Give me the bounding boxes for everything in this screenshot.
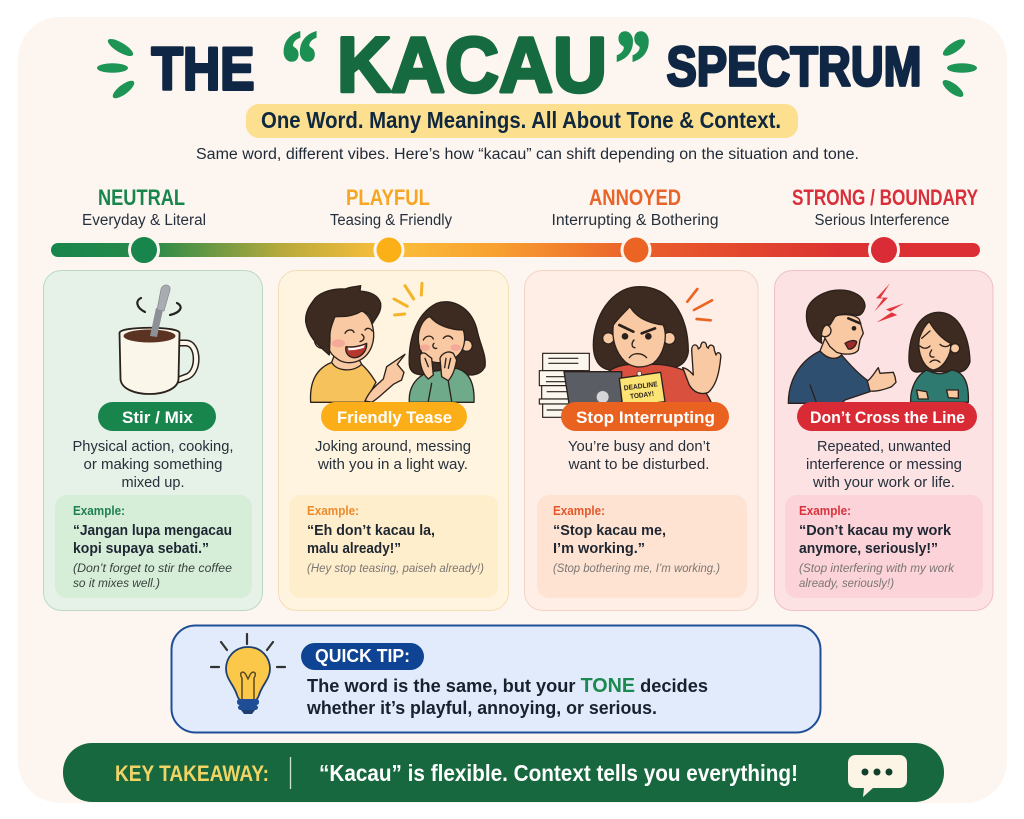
example box: “Stop kacau me,	[553, 523, 666, 539]
illustration: boy and girl laughing	[306, 283, 485, 402]
panel: neutral card	[44, 270, 262, 610]
heading: strong / boundary	[792, 185, 978, 229]
sticky note: deadline today: DEADLINE	[624, 381, 658, 392]
icon: yellow surprise rays	[394, 283, 422, 315]
description: or making something	[84, 456, 222, 473]
panel: quick tip	[172, 626, 820, 732]
description: Repeated, unwanted	[817, 438, 951, 455]
heading: annoyed	[552, 185, 718, 229]
intro sentence: Same word, different vibes. Here’s how “kacau” can shift depending on the situation and tone.	[196, 146, 859, 163]
example box: (Stop interfering with my work	[799, 563, 955, 575]
example box: (Hey stop teasing, paiseh already!)	[307, 563, 484, 575]
example box: (Don’t forget to stir the coffee	[73, 563, 232, 575]
example box: I’m working.”	[553, 541, 645, 557]
pill: stir / mix	[98, 402, 216, 431]
description	[72, 438, 234, 491]
example box	[785, 495, 983, 598]
pill: friendly tease: Friendly Tease	[337, 408, 452, 427]
example box: Example:	[307, 504, 359, 518]
heading: playful: PLAYFUL	[346, 185, 430, 210]
woman	[909, 312, 970, 402]
tip text	[306, 675, 708, 718]
description	[567, 438, 711, 473]
example box	[289, 495, 498, 598]
heading: playful: Teasing & Friendly	[330, 212, 452, 229]
marker: playful	[375, 236, 403, 264]
example box: Example:	[799, 504, 851, 518]
label: key takeaway: KEY TAKEAWAY:	[115, 761, 269, 786]
example box: Example:	[553, 504, 605, 518]
tip text: The word is the same, but your TONE decides	[307, 675, 708, 697]
pill: stop interrupting	[561, 402, 729, 431]
title word: opening quote: “	[281, 12, 318, 114]
heading: annoyed: ANNOYED	[589, 185, 681, 210]
pill: friendly tease	[321, 402, 467, 431]
boy	[306, 286, 405, 402]
subtitle pill	[246, 104, 798, 138]
example box: (Stop bothering me, I’m working.)	[553, 563, 720, 575]
description	[315, 438, 471, 473]
woman	[593, 287, 712, 410]
pill: don't cross the line	[797, 402, 977, 431]
icon: coffee cup with spoon	[120, 285, 196, 394]
description: Physical action, cooking,	[72, 438, 234, 455]
icon: raised stop hand	[683, 342, 721, 394]
tip text: whether it’s playful, annoying, or serious.	[306, 697, 657, 718]
panel: strong card	[774, 270, 993, 610]
example box	[55, 495, 252, 598]
sticky note: deadline today: TODAY!	[630, 391, 654, 401]
heading: annoyed: Interrupting & Bothering	[552, 212, 718, 229]
example box: “Eh don’t kacau la,	[307, 523, 435, 539]
marker: neutral	[130, 236, 158, 264]
icon: light bulb	[211, 634, 285, 714]
heading: neutral	[82, 185, 206, 229]
icon: red lightning bolts	[874, 283, 904, 322]
panel: playful card	[278, 270, 508, 610]
spectrum headings	[82, 185, 978, 229]
example box: “Jangan lupa mengacau	[73, 523, 232, 539]
quick tip pill: QUICK TIP:	[315, 646, 410, 666]
title	[97, 12, 977, 114]
icon: orange anger rays	[687, 289, 712, 320]
description: with your work or life.	[812, 474, 955, 491]
description: interference or messing	[806, 456, 962, 473]
example box: anymore, seriously!”	[799, 541, 938, 557]
icon: right sparkle	[940, 36, 977, 100]
sticky note: deadline today	[619, 371, 665, 407]
description: Joking around, messing	[315, 438, 471, 455]
illustration: annoyed woman at laptop	[539, 287, 721, 417]
title word: THE: THE	[152, 36, 254, 102]
quick tip pill	[301, 643, 424, 670]
marker: strong	[870, 236, 898, 264]
example box: “Don’t kacau my work	[799, 523, 952, 539]
description	[806, 438, 962, 491]
icon: left sparkle	[97, 36, 137, 101]
icon: speech bubble	[848, 755, 907, 797]
heading: strong / boundary: STRONG / BOUNDARY	[792, 185, 978, 210]
icon: paper stack	[539, 353, 589, 417]
marker: annoyed	[622, 236, 650, 264]
example box: so it mixes well.)	[73, 578, 160, 590]
illustration: man confronting woman	[788, 283, 970, 403]
man	[788, 290, 896, 403]
pill: don't cross the line: Don’t Cross the Line	[810, 408, 965, 427]
laptop	[564, 372, 622, 410]
heading: playful	[330, 185, 452, 229]
spectrum slider	[51, 236, 980, 264]
title word: SPECTRUM: SPECTRUM	[666, 34, 922, 98]
example box: Example:	[73, 504, 125, 518]
description: with you in a light way.	[317, 456, 468, 473]
description: mixed up.	[122, 474, 184, 491]
example box: kopi supaya sebati.”	[73, 541, 209, 557]
key takeaway bar	[63, 743, 944, 802]
heading: neutral: Everyday & Literal	[82, 212, 206, 229]
takeaway text: “Kacau” is flexible. Context tells you everything!	[319, 760, 798, 786]
pill: stop interrupting: Stop Interrupting	[576, 408, 715, 427]
pill: stir / mix: Stir / Mix	[122, 408, 194, 427]
subtitle pill: One Word. Many Meanings. All About Tone & Context.	[261, 107, 781, 133]
heading: neutral: NEUTRAL	[98, 185, 185, 210]
panel: annoyed card	[524, 270, 758, 610]
example box: already, seriously!)	[799, 578, 894, 590]
heading: strong / boundary: Serious Interference	[814, 212, 950, 229]
description: You’re busy and don’t	[568, 438, 711, 455]
title word: KACAU: KACAU	[337, 20, 607, 108]
example box	[537, 495, 747, 598]
example box: malu already!”	[307, 541, 401, 557]
girl	[409, 302, 485, 402]
description: want to be disturbed.	[567, 456, 710, 473]
title word: closing quote: ”	[615, 12, 651, 114]
